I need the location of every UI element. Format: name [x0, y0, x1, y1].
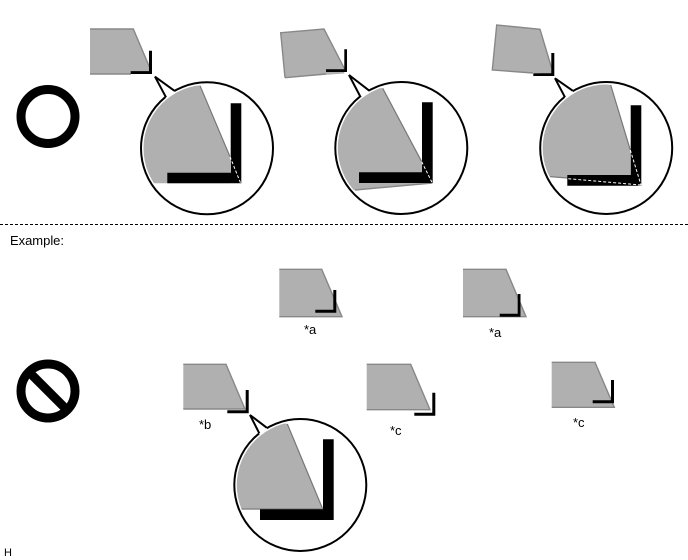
label: b: *b: [199, 417, 211, 432]
diagram: incorrect c2: [552, 362, 614, 407]
diagram: correct example 1 small: [90, 29, 152, 74]
magnified view: correct example 3: [539, 78, 674, 215]
section divider: [0, 224, 688, 226]
magnified view: correct example 2: [334, 74, 468, 215]
label: c: *c: [390, 423, 402, 438]
figure code: H: [4, 547, 12, 559]
diagram: correct example 3 small: [492, 25, 554, 76]
icon: prohibition sign: [21, 364, 75, 418]
diagram: incorrect a1: [279, 269, 342, 317]
diagram: incorrect b: [183, 364, 249, 413]
diagram: incorrect a2: [463, 269, 526, 317]
heading: example: Example:: [10, 233, 64, 248]
magnified view: incorrect b: [233, 414, 368, 552]
label: c: *c: [573, 415, 585, 430]
diagram: correct example 2 small: [281, 29, 347, 78]
diagram: incorrect c1: [367, 364, 435, 416]
icon: correct circle: [21, 90, 75, 144]
label: a: *a: [489, 325, 502, 340]
magnified view: correct example 1: [140, 76, 274, 216]
label: a: *a: [304, 322, 317, 337]
